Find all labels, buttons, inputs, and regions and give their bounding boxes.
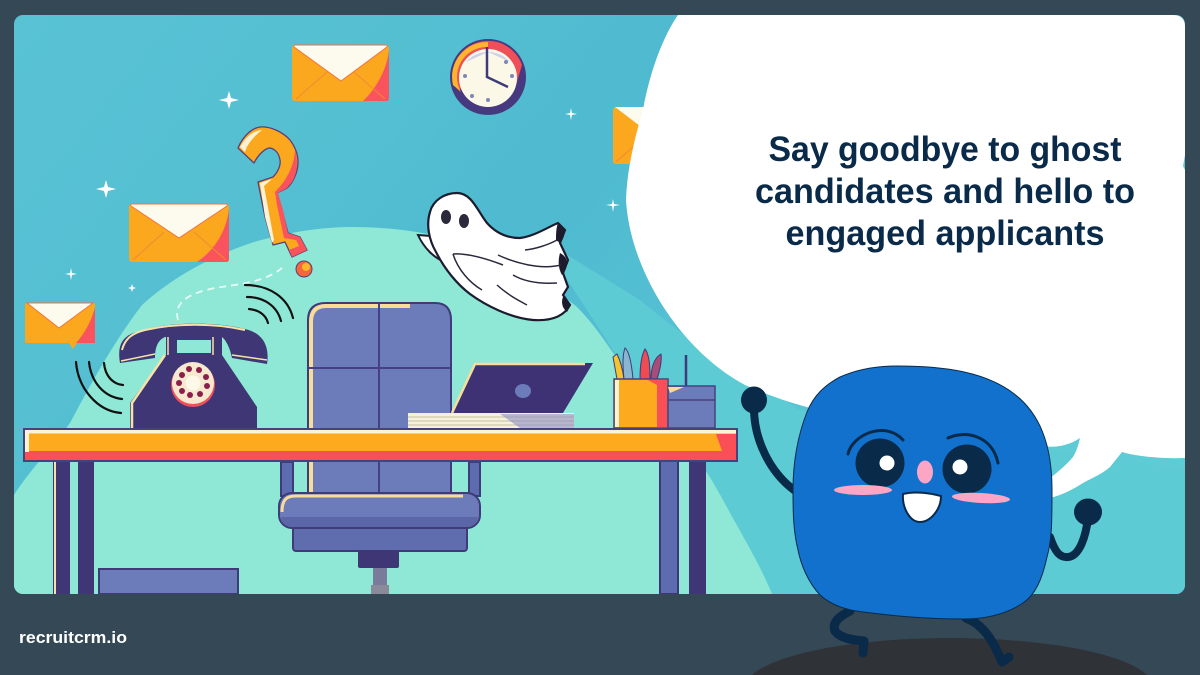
heading: Say goodbye to ghost [768, 130, 1122, 169]
question mark [238, 127, 312, 277]
mascot face [834, 431, 1010, 522]
mascot fists [741, 386, 1102, 526]
floor box [99, 569, 238, 594]
small desk box [668, 355, 715, 428]
heading: engaged applicants [786, 214, 1104, 253]
hill [14, 227, 772, 594]
brand footer: recruitcrm.io [19, 628, 127, 647]
mascot [741, 366, 1102, 662]
chair [279, 303, 480, 594]
pencil holder [613, 348, 668, 428]
mascot body [793, 366, 1052, 619]
envelope top [292, 45, 389, 101]
sparkles [65, 91, 620, 292]
telephone [119, 324, 268, 428]
envelope right partial [613, 107, 644, 164]
envelope middle [129, 204, 229, 262]
speech bubble [626, 15, 1185, 498]
heading [755, 130, 1135, 253]
ghost [418, 193, 570, 320]
ground shadow [752, 638, 1147, 675]
papers [408, 413, 574, 428]
clock [450, 39, 526, 115]
desk [24, 429, 737, 594]
sound waves [76, 285, 293, 413]
dashed call line [177, 268, 282, 320]
envelope left [25, 303, 95, 349]
laptop [452, 363, 593, 413]
heading: candidates and hello to [755, 172, 1135, 211]
mascot arms [754, 408, 1088, 557]
mascot legs [834, 611, 1009, 662]
